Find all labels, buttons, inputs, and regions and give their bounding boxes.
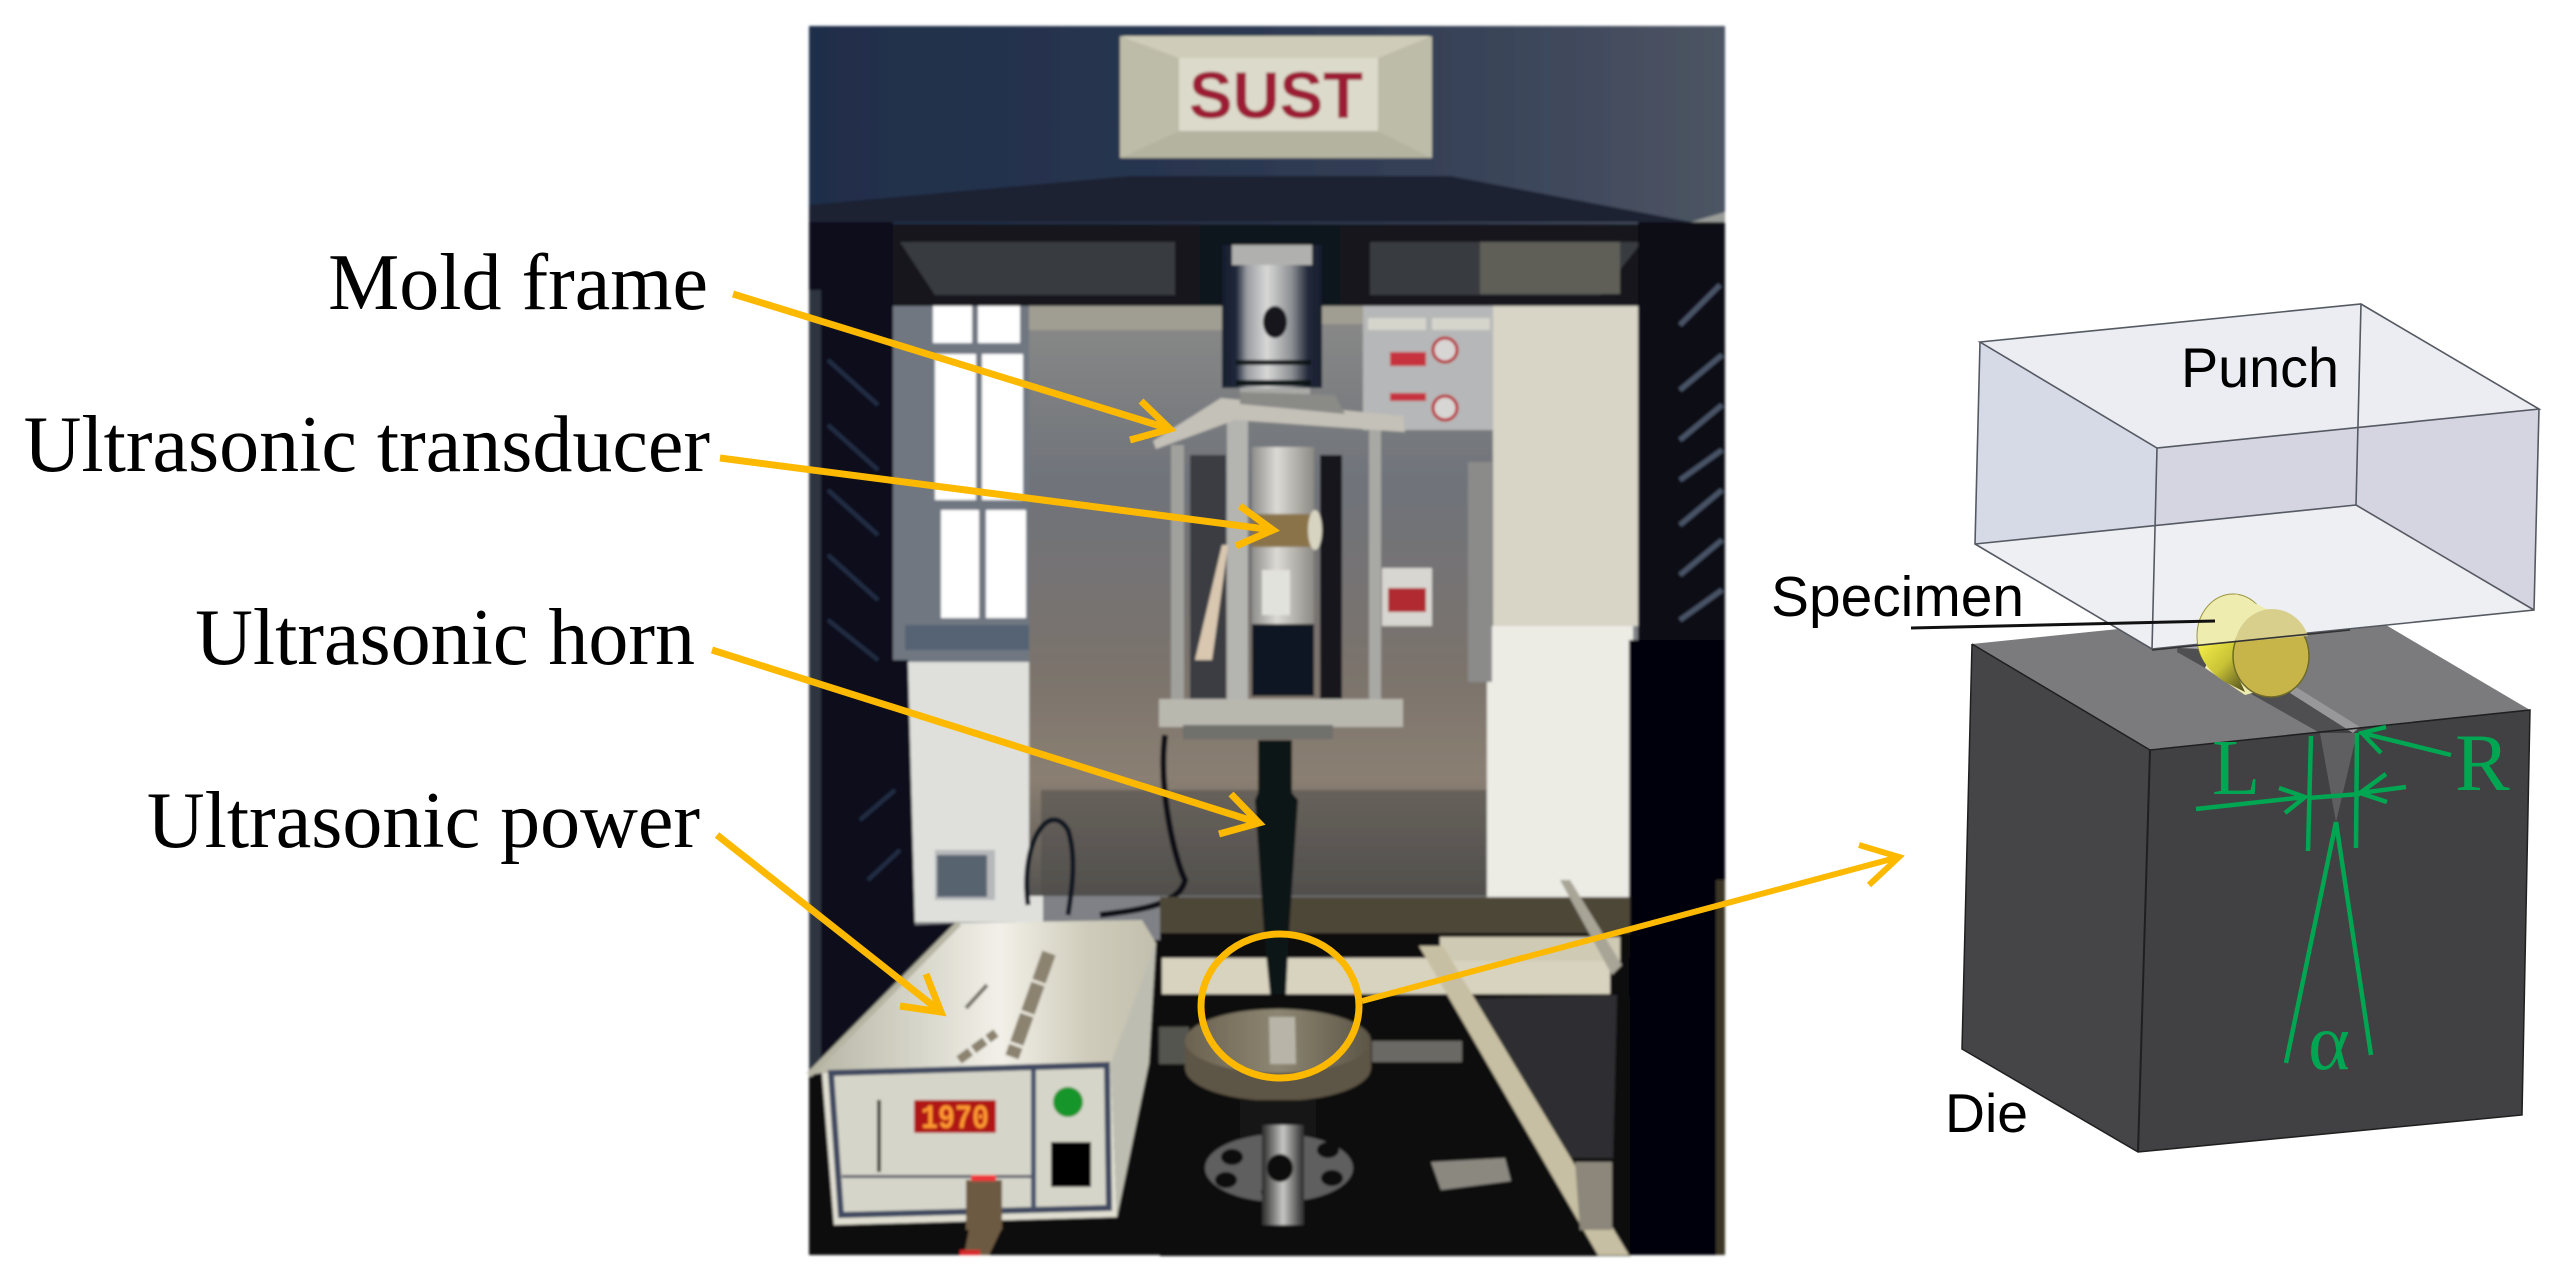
dimensions: L, R and alpha: R bbox=[2455, 717, 2510, 808]
dimensions: L, R and alpha: L bbox=[2212, 725, 2260, 812]
arrow: Mold frame bbox=[733, 294, 1170, 440]
diagram: punch, specimen and die bbox=[1771, 304, 2539, 1152]
dimensions: L, R and alpha bbox=[2196, 717, 2510, 1087]
label: Specimen: Specimen bbox=[1771, 565, 2024, 629]
label: Punch: Punch bbox=[2181, 336, 2339, 399]
chuck bbox=[1222, 245, 1322, 404]
left column bbox=[809, 222, 959, 1075]
ultrasonic power box bbox=[809, 920, 1156, 1225]
steel plate bbox=[1029, 306, 1493, 896]
label: Ultrasonic power: Ultrasonic power bbox=[147, 777, 700, 865]
specimen cylinder bbox=[2152, 594, 2350, 697]
white wall bbox=[1487, 306, 1638, 946]
slide rail and mat bbox=[1419, 946, 1629, 1255]
punch bbox=[1975, 304, 2539, 649]
die bbox=[1962, 605, 2530, 1152]
label: Mold frame: Mold frame bbox=[328, 239, 708, 327]
base and background bbox=[1159, 880, 1630, 1256]
wire and switch bbox=[935, 735, 1185, 915]
dimensions: L, R and alpha: α bbox=[2308, 999, 2350, 1087]
lower plate bbox=[1159, 699, 1403, 739]
label: Ultrasonic horn: Ultrasonic horn bbox=[195, 594, 695, 682]
wall below window bbox=[908, 662, 1043, 922]
rods and mold frame bbox=[1153, 392, 1405, 705]
arrow: Ultrasonic horn bbox=[712, 650, 1259, 834]
handle bbox=[1468, 462, 1492, 682]
crossbeam bbox=[893, 224, 1642, 306]
window bbox=[893, 304, 1041, 664]
horn bbox=[1255, 740, 1298, 994]
disk and specimen bbox=[1185, 1009, 1371, 1101]
flange bbox=[1205, 1100, 1353, 1225]
transducer bbox=[1195, 447, 1432, 696]
arrow: zoom to die detail bbox=[1362, 845, 1899, 1001]
ultrasonic power box: 1970 bbox=[921, 1101, 989, 1139]
arrow: Ultrasonic power bbox=[717, 835, 941, 1012]
label: Ultrasonic transducer: Ultrasonic transducer bbox=[24, 401, 710, 489]
label: Specimen bbox=[1771, 565, 2215, 629]
warning labels bbox=[1363, 306, 1493, 430]
arrow: Ultrasonic transducer bbox=[720, 458, 1273, 546]
label: Die: Die bbox=[1945, 1082, 2028, 1144]
sign: SUST: SUST bbox=[1189, 58, 1363, 132]
sign: SUST bbox=[1120, 36, 1432, 158]
callout circle bbox=[1201, 934, 1359, 1078]
plug bbox=[960, 1175, 1002, 1255]
right column bbox=[1629, 222, 1725, 1255]
photo: ultrasonic test machine bbox=[809, 26, 1725, 1256]
